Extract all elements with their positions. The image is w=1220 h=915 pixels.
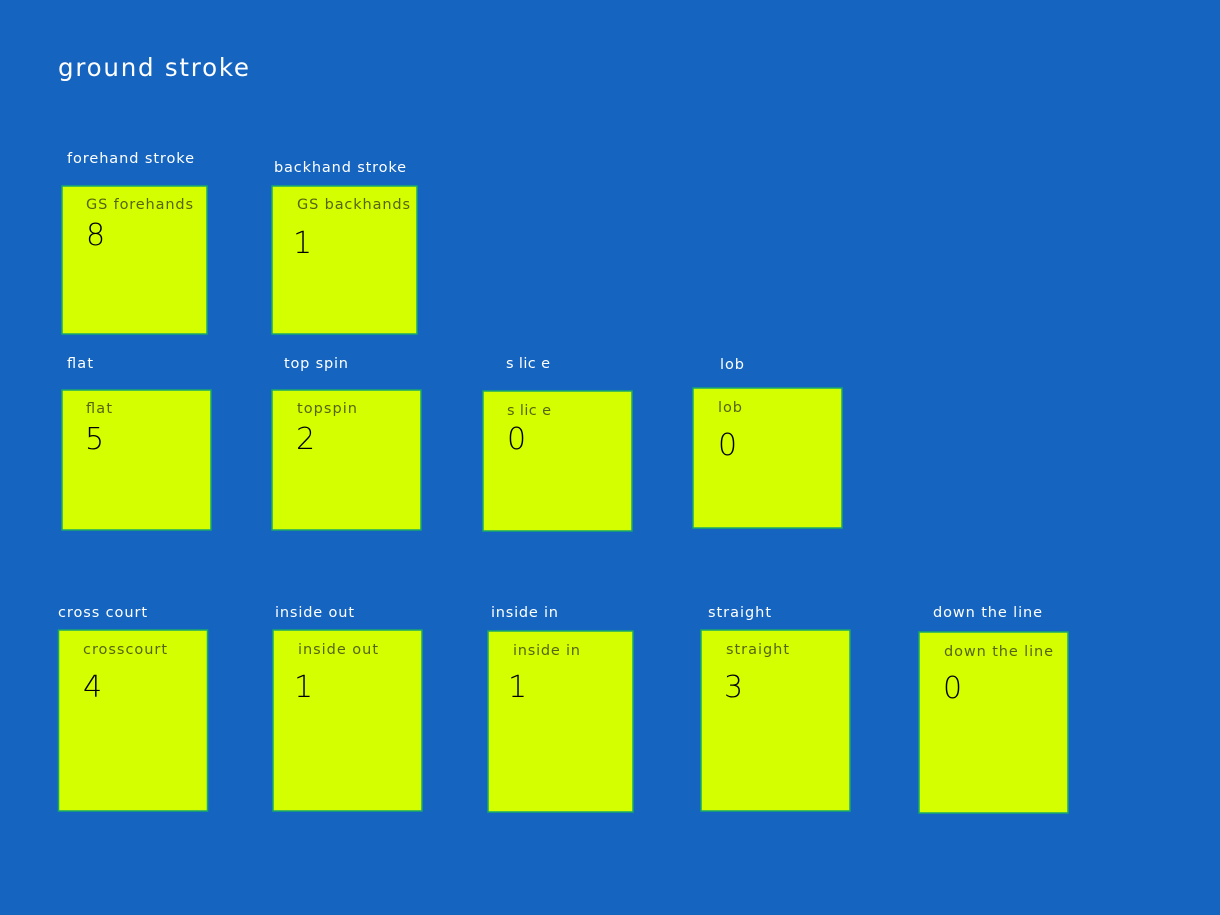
panel: inside in [488,605,633,812]
panel: top spin: 2 [296,422,315,457]
panel: backhand stroke [272,160,417,334]
panel: backhand stroke: GS backhands [297,197,410,213]
panel: slice: s lic e [506,356,550,372]
panel: down the line: 0 [943,671,962,706]
panel: forehand stroke [62,151,207,334]
panel: top spin: topspin [297,401,357,417]
panel: flat: flat [86,401,112,417]
panel: lob [693,357,842,528]
panel: inside in: inside in [491,605,558,621]
panel: inside in: 1 [508,670,527,705]
panel: slice: 0 [507,422,526,457]
panel: inside out [273,605,422,811]
panel: forehand stroke: 8 [86,218,105,253]
panel: forehand stroke: GS forehands [86,197,193,213]
panel: down the line: down the line [933,605,1042,621]
panel: straight: straight [726,642,789,658]
panel: backhand stroke: 1 [293,226,312,261]
panel: backhand stroke: backhand stroke [274,160,406,176]
panel: top spin: top spin [284,356,348,372]
panel: cross court: 4 [83,670,102,705]
panel: inside out: 1 [294,670,313,705]
panel: slice: s lic e [507,403,551,419]
panel: inside in: inside in [513,643,580,659]
panel: flat: flat [67,356,93,372]
panel: straight [701,605,850,811]
title: ground stroke [58,53,249,82]
panel: straight: 3 [724,670,743,705]
panel: cross court: crosscourt [83,642,167,658]
panel: straight: straight [708,605,771,621]
panel: flat: 5 [85,422,104,457]
panel: top spin [272,356,421,530]
panel: lob: lob [720,357,744,373]
panel: lob: 0 [718,428,737,463]
panel: cross court: cross court [58,605,147,621]
panel: forehand stroke: forehand stroke [67,151,194,167]
panel: lob: lob [718,400,742,416]
panel: down the line [919,605,1068,813]
panel: inside out: inside out [275,605,354,621]
panel: inside out: inside out [298,642,378,658]
panel: cross court [58,605,208,811]
panel: down the line: down the line [944,644,1053,660]
panel: slice [483,356,632,531]
panel: flat [62,356,211,530]
